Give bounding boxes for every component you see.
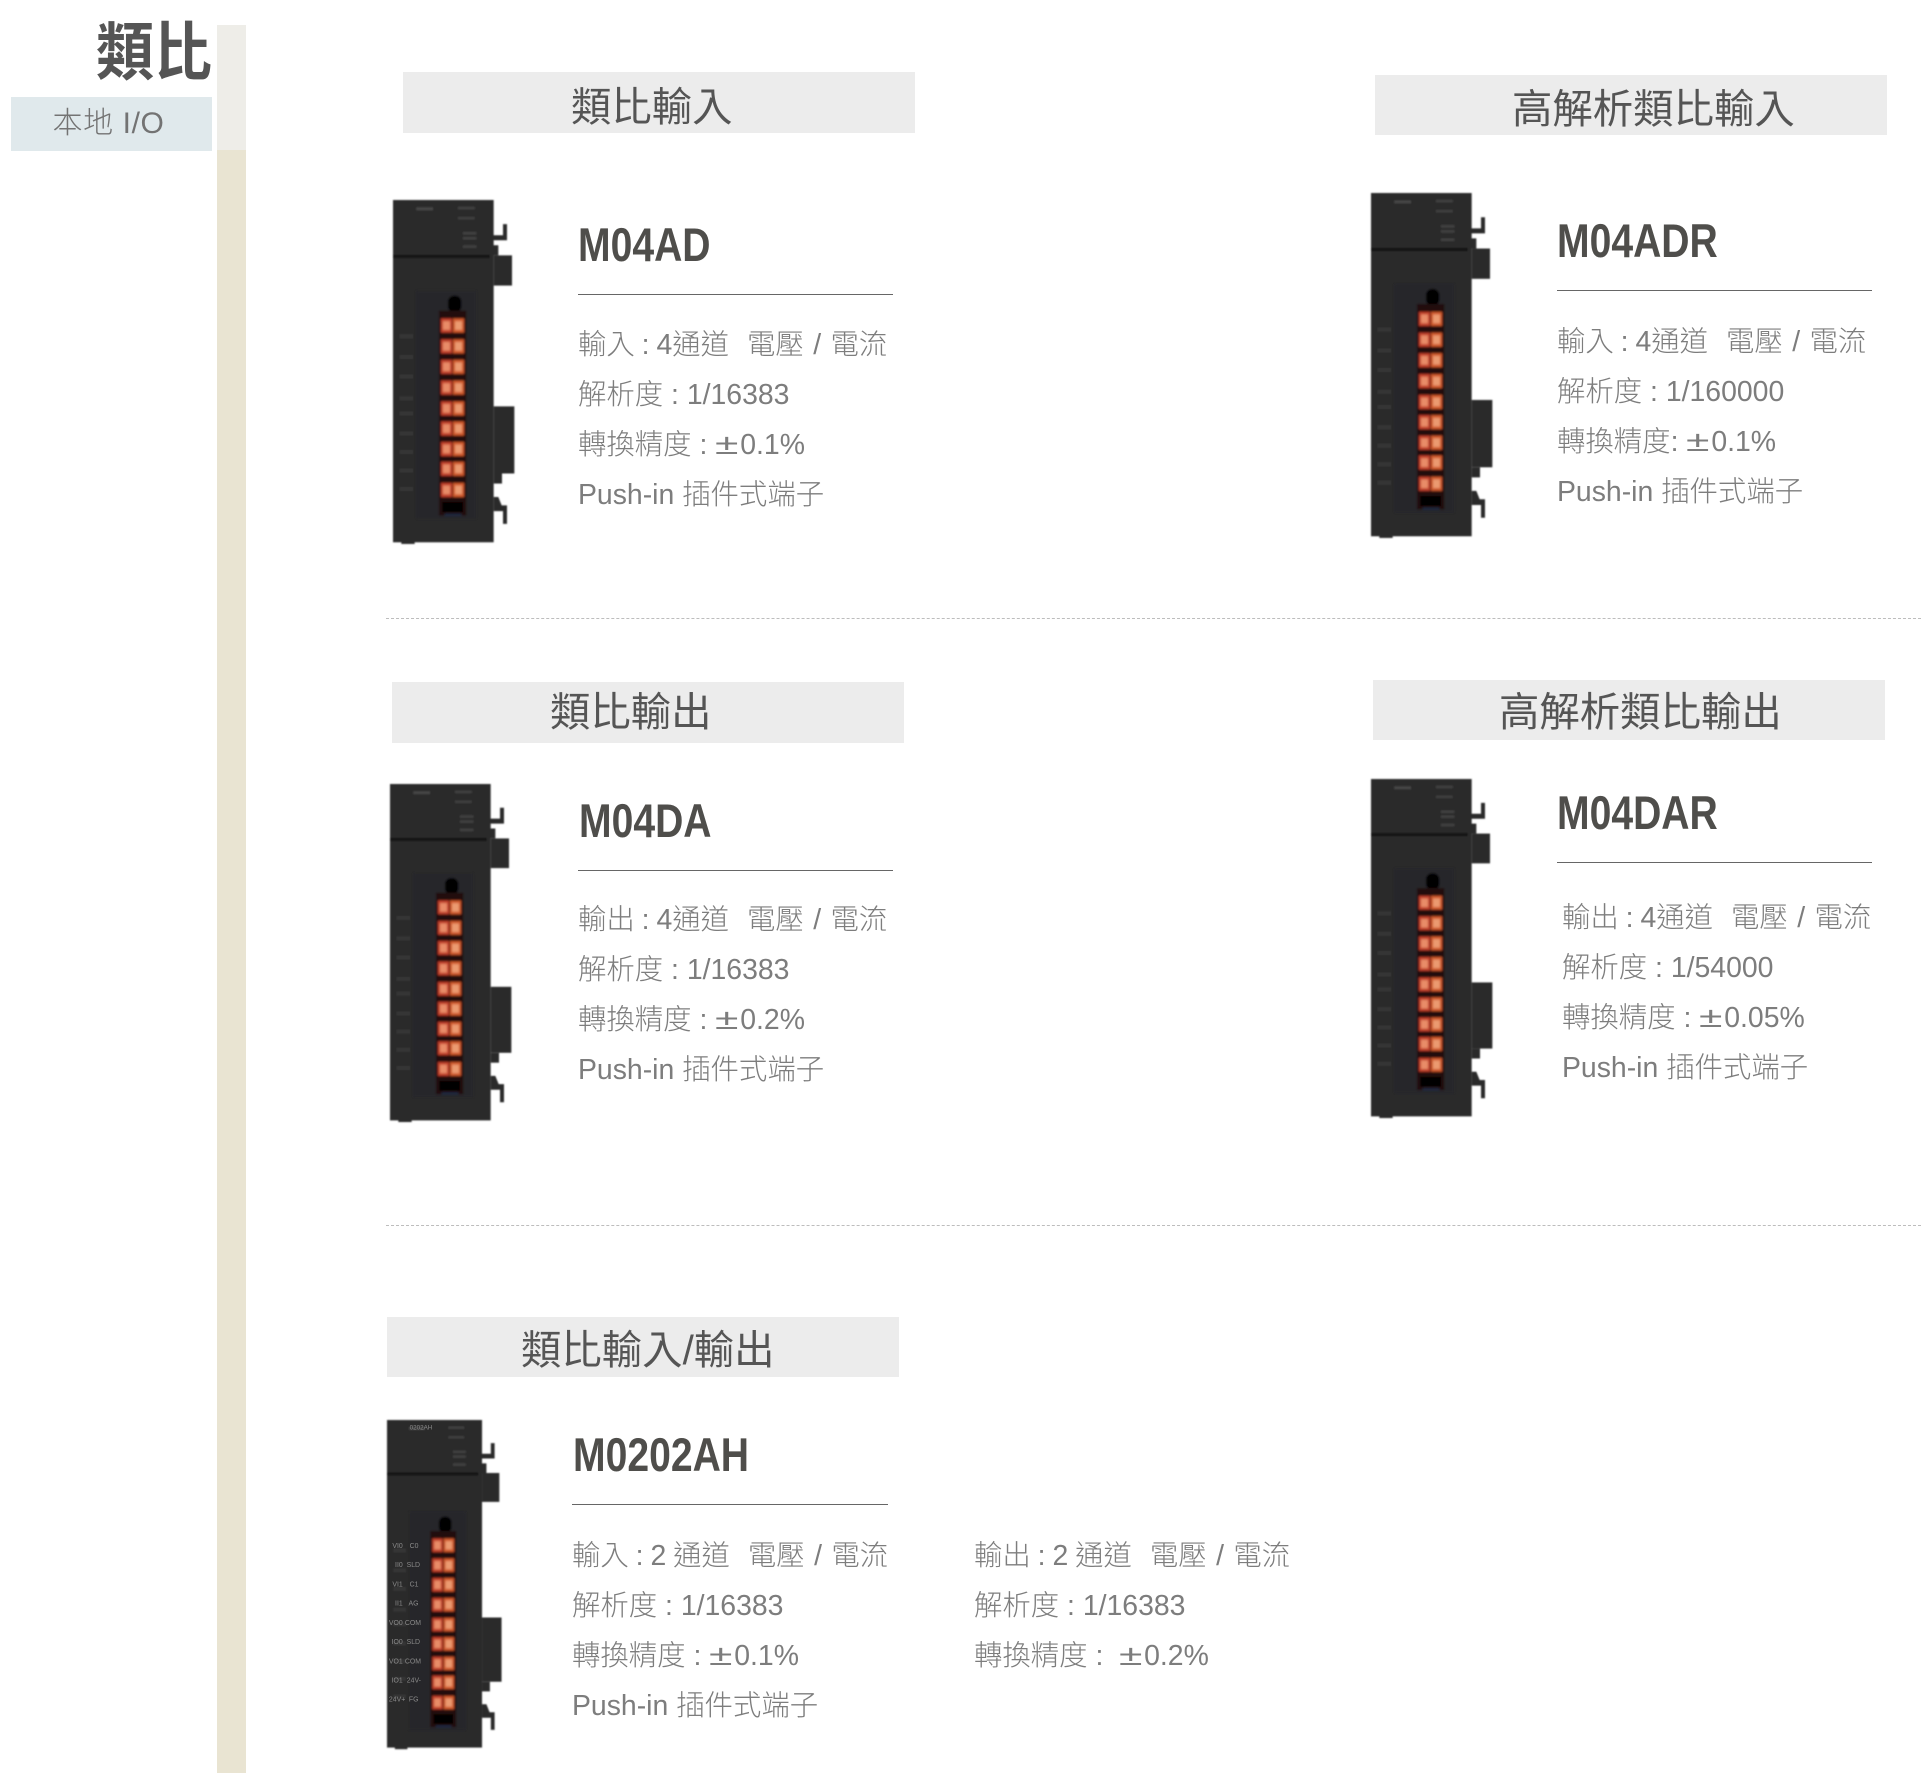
panel: high-resolution analog output M04DAR bbox=[1370, 680, 1885, 1120]
image: M0202AH module: C0 bbox=[410, 1543, 419, 1550]
image: M0202AH module: 0202AH bbox=[410, 1425, 433, 1432]
panel: analog input M04AD bbox=[392, 72, 915, 546]
subtitle: local I/O: 本地 I/O bbox=[53, 107, 164, 140]
spec list: 解析度 : 1/54000 bbox=[1562, 952, 1773, 984]
heading: high-resolution analog input bbox=[1375, 75, 1887, 135]
heading: analog input/output bbox=[387, 1317, 899, 1377]
spec list: 轉換精度 : 0.2% bbox=[578, 1004, 805, 1036]
spec list: output: 輸出 : 2 通道 電壓 / 電流 bbox=[974, 1540, 1290, 1572]
panel: analog output M04DA bbox=[388, 682, 904, 1124]
spec list: input: 輸入 : 2 通道 電壓 / 電流 bbox=[572, 1540, 888, 1572]
spec list: 輸入 : 4通道 電壓 / 電流 bbox=[1557, 326, 1866, 358]
image: M0202AH module: VO1 bbox=[389, 1658, 403, 1665]
image: M0202AH module: 24V+ bbox=[389, 1696, 405, 1703]
image: M0202AH module bbox=[386, 1418, 503, 1750]
divider bbox=[386, 618, 1921, 619]
spec list: 轉換精度 : 0.05% bbox=[1562, 1002, 1805, 1034]
heading: high-resolution analog input: 高解析類比輸入 bbox=[1512, 86, 1795, 132]
image: M0202AH module: SLD bbox=[407, 1639, 420, 1646]
image: M04DAR module bbox=[1370, 778, 1494, 1120]
spec list: Push-in 插件式端子 bbox=[578, 1054, 824, 1086]
heading: analog output: 類比輸出 bbox=[550, 689, 712, 735]
heading: analog output bbox=[392, 682, 904, 743]
spec list: output bbox=[974, 1540, 1290, 1672]
spec list: input bbox=[572, 1540, 888, 1722]
subtitle: local I/O bbox=[11, 97, 212, 151]
spec list: output: 轉換精度 : 0.2% bbox=[974, 1640, 1209, 1672]
panel: analog input/output M0202AH bbox=[386, 1317, 1290, 1750]
image: M0202AH module: 24V- bbox=[407, 1678, 422, 1685]
image: M0202AH module: II0 bbox=[395, 1562, 403, 1569]
spec list: output: 解析度 : 1/16383 bbox=[974, 1590, 1185, 1622]
model name: M04AD bbox=[578, 218, 711, 271]
image: M0202AH module: VI1 bbox=[392, 1581, 403, 1588]
spec list: ± bbox=[1686, 426, 1710, 458]
spec list bbox=[578, 329, 887, 511]
spec list: 解析度 : 1/16383 bbox=[578, 954, 789, 986]
spec list: 輸入 : 4通道 電壓 / 電流 bbox=[578, 329, 887, 361]
spec list bbox=[1557, 326, 1866, 508]
sidebar bar bbox=[217, 25, 246, 1773]
spec list: input: Push-in 插件式端子 bbox=[572, 1690, 818, 1722]
spec list bbox=[1562, 902, 1871, 1084]
model name: M04DAR bbox=[1557, 786, 1718, 839]
spec list: 輸出 : 4通道 電壓 / 電流 bbox=[578, 904, 887, 936]
spec list: ± bbox=[715, 429, 739, 461]
spec list: 轉換精度 : 0.1% bbox=[578, 429, 805, 461]
image: M0202AH module: FG bbox=[409, 1696, 418, 1703]
heading: high-resolution analog output bbox=[1373, 680, 1885, 740]
spec list: input: 解析度 : 1/16383 bbox=[572, 1590, 783, 1622]
spec list: Push-in 插件式端子 bbox=[1562, 1052, 1808, 1084]
image: M0202AH module: COM bbox=[405, 1620, 421, 1627]
image: M0202AH module: VI0 bbox=[392, 1543, 403, 1550]
spec list: output: ± bbox=[1119, 1640, 1143, 1672]
image: M0202AH module: II1 bbox=[395, 1601, 403, 1608]
image: M04DA module bbox=[388, 782, 512, 1124]
image: M0202AH module: VO0 bbox=[389, 1620, 403, 1627]
image: M0202AH module: COM bbox=[405, 1658, 421, 1665]
image: M04ADR module bbox=[1370, 192, 1494, 540]
model name: M04DA bbox=[579, 794, 712, 847]
spec list bbox=[578, 904, 887, 1086]
heading: analog input bbox=[403, 72, 915, 133]
panel: high-resolution analog input M04ADR bbox=[1370, 75, 1887, 540]
spec list: ± bbox=[1699, 1002, 1723, 1034]
divider bbox=[386, 1225, 1921, 1226]
spec list: 輸出 : 4通道 電壓 / 電流 bbox=[1562, 902, 1871, 934]
model name: M0202AH bbox=[573, 1428, 749, 1481]
spec list: Push-in 插件式端子 bbox=[578, 479, 824, 511]
spec list: ± bbox=[715, 1004, 739, 1036]
heading: analog input/output: 類比輸入/輸出 bbox=[521, 1327, 775, 1373]
spec list: 解析度 : 1/160000 bbox=[1557, 376, 1784, 408]
heading: analog input: 類比輸入 bbox=[571, 84, 733, 130]
image: M0202AH module: AG bbox=[408, 1601, 418, 1608]
spec list: input: 轉換精度 : 0.1% bbox=[572, 1640, 799, 1672]
spec list: 轉換精度: 0.1% bbox=[1557, 426, 1776, 458]
spec list: input: ± bbox=[709, 1640, 733, 1672]
heading: high-resolution analog output: 高解析類比輸出 bbox=[1499, 689, 1782, 735]
model name: M04ADR bbox=[1557, 214, 1718, 267]
spec list: Push-in 插件式端子 bbox=[1557, 476, 1803, 508]
image: M0202AH module: IO1 bbox=[392, 1678, 403, 1685]
spec list: 解析度 : 1/16383 bbox=[578, 379, 789, 411]
image: M04AD module bbox=[392, 198, 516, 546]
image: M0202AH module: C1 bbox=[410, 1581, 419, 1588]
image: M0202AH module: IO0 bbox=[392, 1639, 403, 1646]
image: M0202AH module: SLD bbox=[407, 1562, 420, 1569]
title: 類比 bbox=[96, 18, 212, 89]
